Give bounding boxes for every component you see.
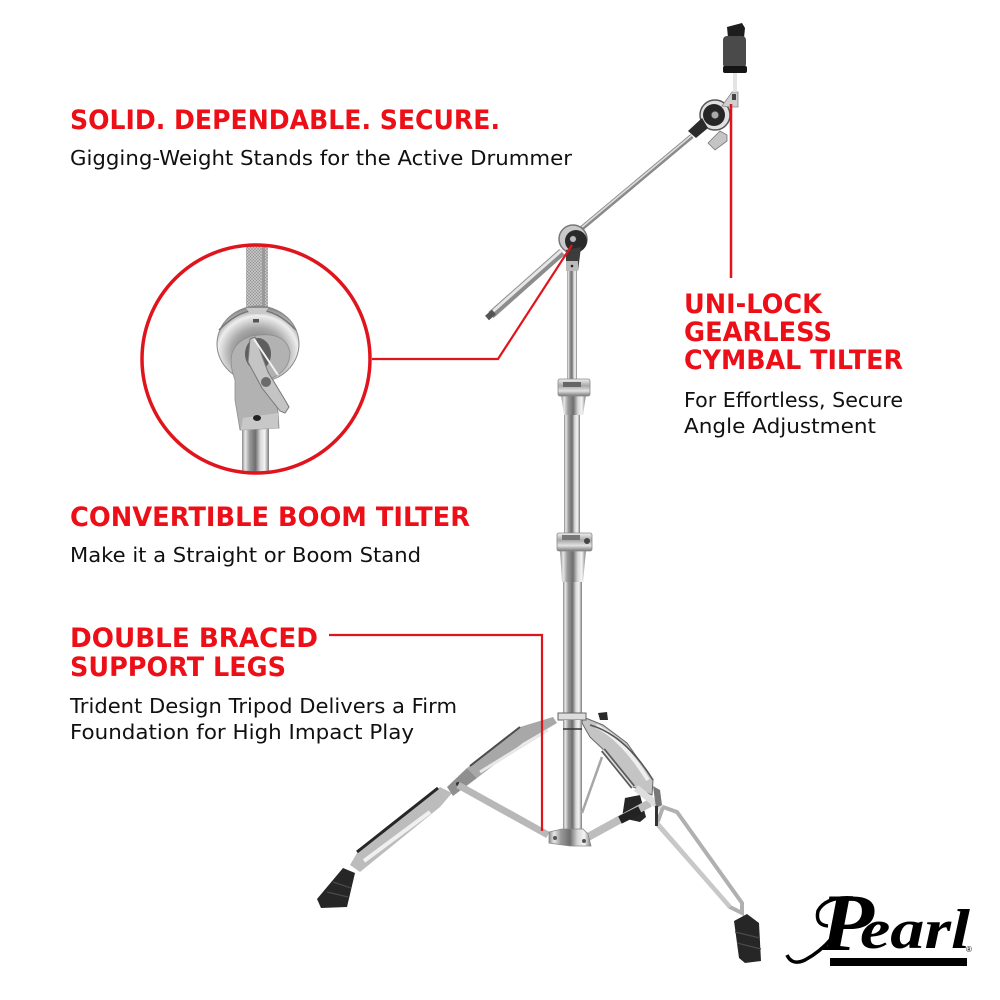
upper tripod collar [558,712,608,729]
red leader: support legs [329,635,542,831]
left leg [350,717,557,872]
inset: boom tilter close-up [142,245,370,473]
cymbal stem and felt sleeve [723,23,747,92]
callout text: double braced support legs: SUPPORT LEGS [70,652,286,683]
boom tilter [559,225,587,271]
wing lever [245,337,289,413]
left leg brace [458,785,548,835]
rubber foot right [734,914,761,963]
callout text: uni-lock gearless cymbal tilter: Angle Adjustment [684,414,876,438]
tilter bracket [231,335,290,430]
callout text: convertible boom tilter: Make it a Straight or Boom Stand [70,543,421,567]
callout text: uni-lock gearless cymbal tilter: UNI-LOCK [684,289,823,320]
logo swash [787,898,853,962]
logo: Pearl [787,877,972,968]
tilter disc [217,306,299,382]
knurled upper tube [246,246,268,314]
main pole [557,268,592,832]
logo underline [830,958,967,966]
callout text: convertible boom tilter [70,502,470,567]
heading: solid dependable secure: SOLID. DEPENDABLE. SECURE. [70,105,500,136]
cymbal tilter head [688,92,738,150]
rubber foot left [317,868,355,908]
callout text: double braced support legs: Foundation for High Impact Play [70,720,414,744]
illustration: boom cymbal stand [317,23,761,963]
callout text: convertible boom tilter: CONVERTIBLE BOOM TILTER [70,502,470,533]
inset circle [142,245,370,473]
callout text: double braced support legs: DOUBLE BRACED [70,623,318,654]
boom arm [487,135,692,318]
lower tripod hub [549,829,591,846]
callout text: double braced support legs: Trident Design Tripod Delivers a Firm [69,694,457,718]
lower tube [242,428,269,472]
subheading: gigging-weight stands: Gigging-Weight Stands for the Active Drummer [70,146,573,170]
callout text: uni-lock gearless cymbal tilter: CYMBAL TILTER [684,345,903,376]
callout text: uni-lock gearless cymbal tilter: For Effortless, Secure [684,388,903,412]
back leg and braces [582,717,653,837]
registered mark: ® [966,945,972,954]
red leader: cymbal tilter [730,104,732,278]
red leader: boom tilter to inset [372,245,572,359]
logo wordmark letters: earl [860,899,971,961]
right leg [636,786,742,913]
callout text: double braced support legs [69,623,457,744]
callout text: uni-lock gearless cymbal tilter: GEARLESS [684,317,832,348]
callout text: uni-lock gearless cymbal tilter [684,289,903,438]
logo wordmark: P [819,877,875,968]
